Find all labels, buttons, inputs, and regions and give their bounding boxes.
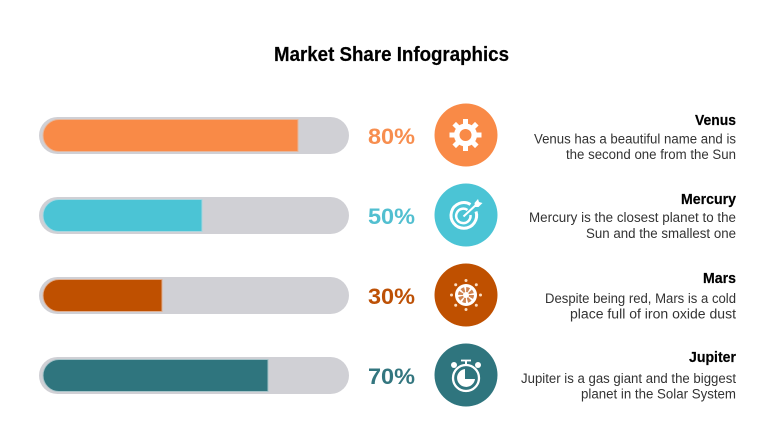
- row: Venus: [39, 104, 736, 166]
- text: Mars: [545, 270, 736, 322]
- text: Mars: place full of iron oxide dust: [570, 306, 736, 322]
- text: Venus: Venus: [695, 112, 736, 129]
- icon: target: [434, 184, 498, 246]
- icon: gear: [434, 104, 498, 166]
- text: Mercury: [529, 191, 737, 241]
- text: Jupiter: [521, 349, 736, 402]
- title: Market Share Infographics: [274, 44, 509, 66]
- text: Venus: the second one from the Sun: [566, 147, 736, 162]
- icon: stopwatch: [434, 344, 498, 406]
- text: Venus: Venus has a beautiful name and is: [534, 132, 736, 146]
- bar: Mars 30%: [39, 277, 349, 314]
- bar: Mercury 50%: [39, 197, 349, 234]
- percentage: 80%: 80%: [368, 124, 415, 149]
- text: Jupiter: Jupiter is a gas giant and the biggest: [521, 371, 736, 386]
- text: Jupiter: Jupiter: [689, 349, 736, 366]
- row: Mercury: [39, 184, 737, 246]
- text: Mars: Despite being red, Mars is a cold: [545, 291, 736, 306]
- row: Jupiter: [39, 344, 736, 406]
- bar: Jupiter 70%: [39, 357, 349, 394]
- text: Mercury: Sun and the smallest one: [586, 226, 736, 241]
- percentage: 70%: 70%: [368, 364, 415, 389]
- text: Mars: Mars: [703, 270, 736, 287]
- percentage: 30%: 30%: [368, 284, 415, 309]
- text: Mercury: Mercury: [681, 191, 737, 208]
- bar: Venus 80%: [39, 117, 349, 154]
- text: Venus: [534, 112, 736, 162]
- icon: ship wheel: [434, 264, 498, 326]
- percentage: 50%: 50%: [368, 204, 415, 229]
- text: Jupiter: planet in the Solar System: [581, 386, 736, 402]
- row: Mars: [39, 264, 736, 326]
- text: Mercury: Mercury is the closest planet to the: [529, 210, 736, 225]
